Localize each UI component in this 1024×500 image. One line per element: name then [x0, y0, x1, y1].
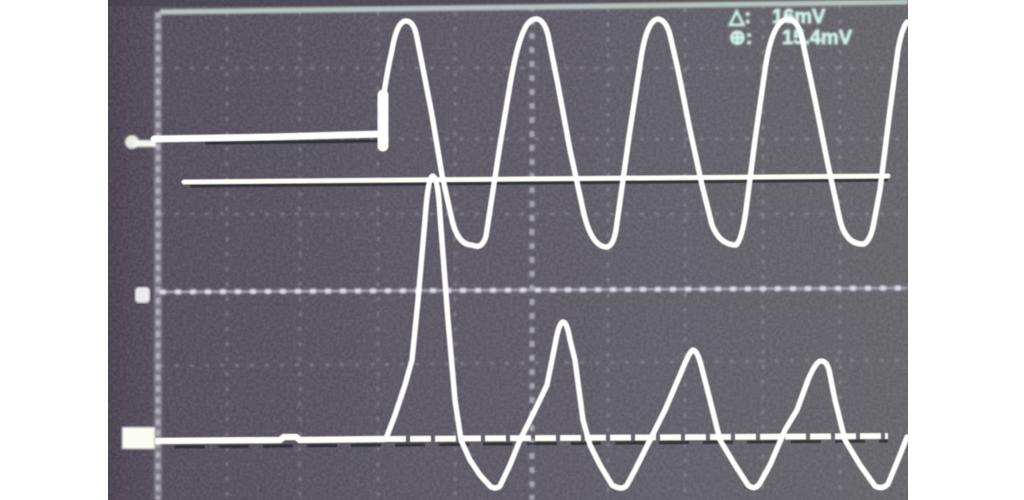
channel marker 3	[135, 287, 150, 303]
graticule grid	[158, 2, 908, 500]
channel marker 2	[125, 135, 156, 149]
baseline: lower channel	[155, 436, 888, 441]
waveform: lower channel	[387, 176, 907, 488]
trace shadows	[175, 141, 888, 447]
waveform: upper channel	[154, 19, 907, 247]
reference line: middle	[184, 176, 888, 182]
channel marker 1	[122, 427, 155, 449]
readout text: cursor values: 15.4mV	[782, 27, 853, 49]
readout text: cursor values: ⊕:	[729, 27, 752, 49]
readout text: cursor values: 16mV	[772, 6, 826, 28]
readout text: cursor values	[728, 6, 853, 49]
readout text: cursor values: △:	[728, 6, 751, 28]
screen background	[108, 0, 908, 500]
